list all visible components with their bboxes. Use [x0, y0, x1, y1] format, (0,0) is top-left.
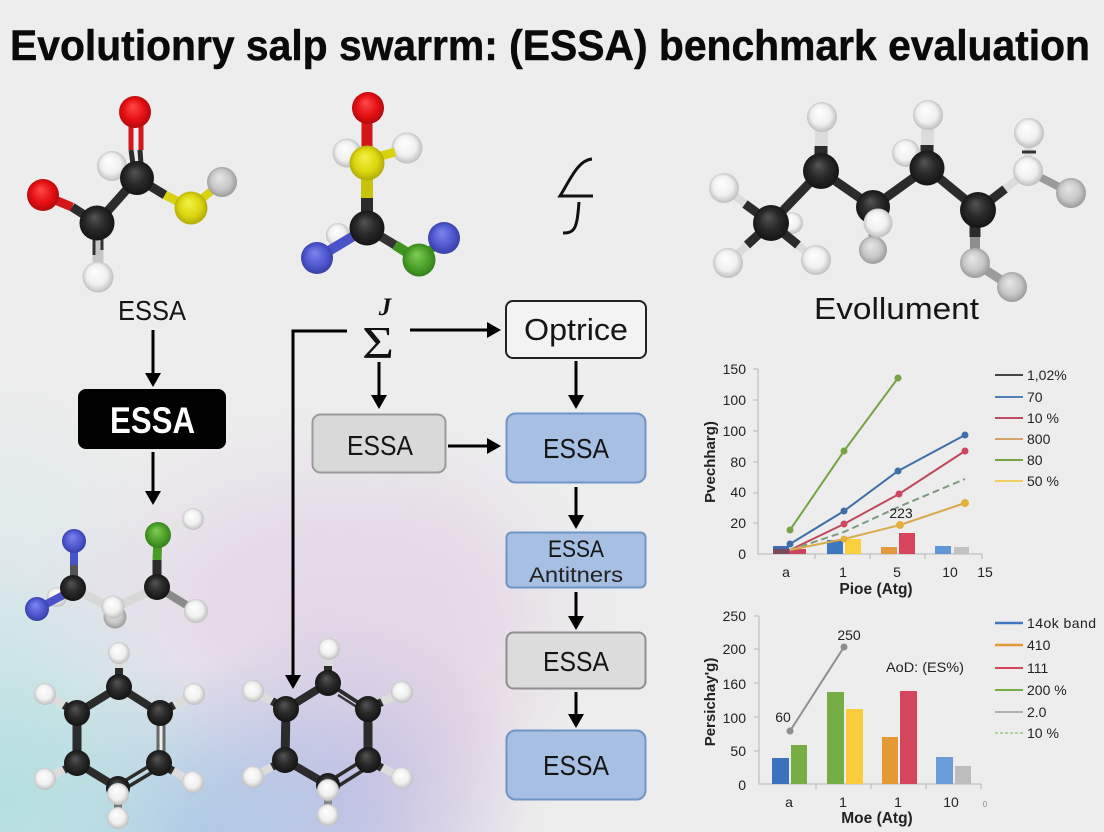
y axis tick labels: 40 — [730, 484, 746, 500]
legend: top chart: 1,02% — [1027, 367, 1067, 383]
y axis tick labels: 160 — [723, 676, 746, 692]
arrow: Antitners box to grey box — [568, 592, 584, 630]
legend: bottom chart — [995, 615, 1096, 741]
molecule: top left — [27, 96, 237, 292]
y axis tick labels — [723, 608, 746, 793]
legend: bottom chart: 111 — [1027, 660, 1048, 676]
box: blue ESSA 1: ESSA — [543, 433, 609, 464]
box: grey ESSA 2 — [506, 632, 646, 688]
x axis title: Moe (Atg) — [841, 810, 913, 827]
y axis tick labels: 100 — [723, 392, 746, 408]
box: grey ESSA — [312, 414, 446, 472]
arrow: grey box to blue box — [448, 438, 501, 454]
box: ESSA Antitners: Antitners — [529, 564, 623, 587]
x axis tick labels — [785, 794, 988, 810]
data labels: AoD: (ES%) — [886, 659, 964, 675]
molecule: bottom left ring — [34, 642, 205, 829]
arrow: grey box to final blue box — [568, 692, 584, 728]
box: ESSA Antitners: ESSA — [548, 536, 604, 563]
arrow: ESSA to black box — [145, 330, 161, 387]
data labels — [775, 627, 964, 725]
legend: bottom chart: 10 % — [1027, 725, 1059, 741]
symbol: summation: Σ — [362, 317, 394, 368]
box: blue ESSA final — [506, 730, 646, 800]
x axis tick labels: 0 — [983, 800, 988, 809]
y axis tick labels: 80 — [730, 454, 746, 470]
axis titles: Pioe (Atg) — [839, 581, 913, 598]
bars — [773, 533, 969, 554]
chart: top line chart — [702, 361, 993, 598]
bars — [772, 691, 971, 784]
box: Optrice: Optrice — [524, 312, 628, 347]
x axis tick labels: 10 — [943, 794, 959, 810]
x axis tick labels: 1 — [839, 794, 847, 810]
legend: bottom chart: 200 % — [1027, 682, 1067, 698]
y axis tick labels: 200 — [723, 641, 746, 657]
arrow: summation to Optrice — [410, 322, 501, 338]
arrow: black box to molecule — [145, 452, 161, 505]
grey line series — [786, 644, 848, 734]
legend: top chart: 800 — [1027, 431, 1051, 447]
y axis tick labels: 100 — [723, 710, 746, 726]
y axis tick labels: 0 — [738, 777, 746, 793]
arrow: summation to grey box — [371, 362, 387, 409]
legend: top chart: 10 % — [1027, 410, 1059, 426]
y axis title: Pvechharg) — [702, 421, 719, 503]
arrow: blue box to Antitners box — [568, 487, 584, 529]
x axis tick labels: 1 — [839, 564, 847, 580]
legend: top chart: 70 — [1027, 389, 1043, 405]
y axis tick labels: 0 — [738, 546, 746, 562]
box: blue ESSA 1 — [506, 414, 646, 482]
box: ESSA Antitners — [506, 532, 646, 588]
label: Evollument: Evollument — [814, 291, 979, 326]
legend: bottom chart: 2.0 — [1027, 704, 1047, 720]
icon: integral symbol — [560, 159, 593, 233]
molecule: middle left — [25, 508, 208, 628]
box: Optrice — [506, 301, 646, 358]
data label: 223 — [889, 505, 913, 521]
molecule: top centre — [301, 92, 460, 276]
arrow: Optrice to blue box — [568, 361, 584, 409]
legend: top chart: 50 % — [1027, 473, 1059, 489]
molecule: top right — [709, 100, 1086, 302]
box: blue ESSA final: ESSA — [543, 750, 609, 781]
x axis tick labels — [782, 564, 993, 580]
y axis tick labels: 150 — [723, 361, 746, 377]
box: black ESSA — [78, 389, 226, 449]
y axis tick labels: 50 — [730, 743, 746, 759]
legend: bottom chart: 410 — [1027, 637, 1051, 653]
chart: bottom bar chart — [702, 608, 988, 827]
x axis tick labels: a — [785, 794, 793, 810]
x axis tick labels: a — [782, 564, 790, 580]
y axis tick labels: 250 — [723, 608, 746, 624]
y axis title: Persichay'g) — [702, 658, 719, 746]
arrow: feedback line to ring — [285, 331, 347, 689]
box: grey ESSA: ESSA — [347, 430, 413, 461]
data labels: 60 — [775, 709, 791, 725]
y axis tick labels — [723, 361, 746, 562]
box: black ESSA: ESSA — [110, 400, 195, 441]
x axis tick labels: 10 — [942, 564, 958, 580]
box: grey ESSA 2: ESSA — [543, 646, 609, 677]
line markers — [786, 374, 969, 548]
symbol: summation — [362, 294, 394, 368]
x axis tick labels: 1 — [894, 794, 902, 810]
line series — [790, 378, 965, 550]
y axis tick labels: 20 — [730, 515, 746, 531]
x axis tick labels: 5 — [893, 564, 901, 580]
legend: top chart: 80 — [1027, 452, 1043, 468]
legend: top chart — [995, 367, 1067, 489]
symbol: summation: J — [378, 294, 393, 321]
data labels: 250 — [837, 627, 861, 643]
label: ESSA left: ESSA — [118, 295, 186, 326]
y axis tick labels: 100 — [723, 423, 746, 439]
molecule: bottom centre ring — [242, 638, 413, 826]
legend: bottom chart: 14ok band — [1027, 615, 1096, 631]
x axis tick labels: 15 — [977, 564, 993, 580]
